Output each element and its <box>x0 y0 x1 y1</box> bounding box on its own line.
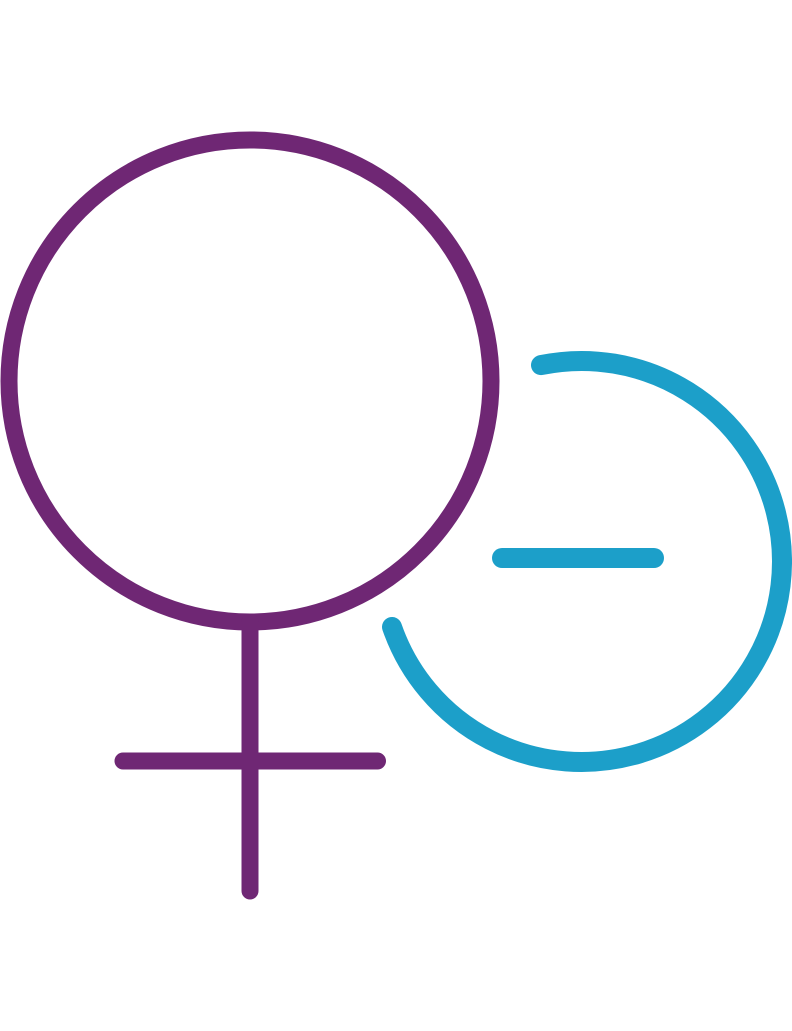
icon: minus in open circle <box>392 361 782 762</box>
icon: female symbol <box>9 140 491 891</box>
